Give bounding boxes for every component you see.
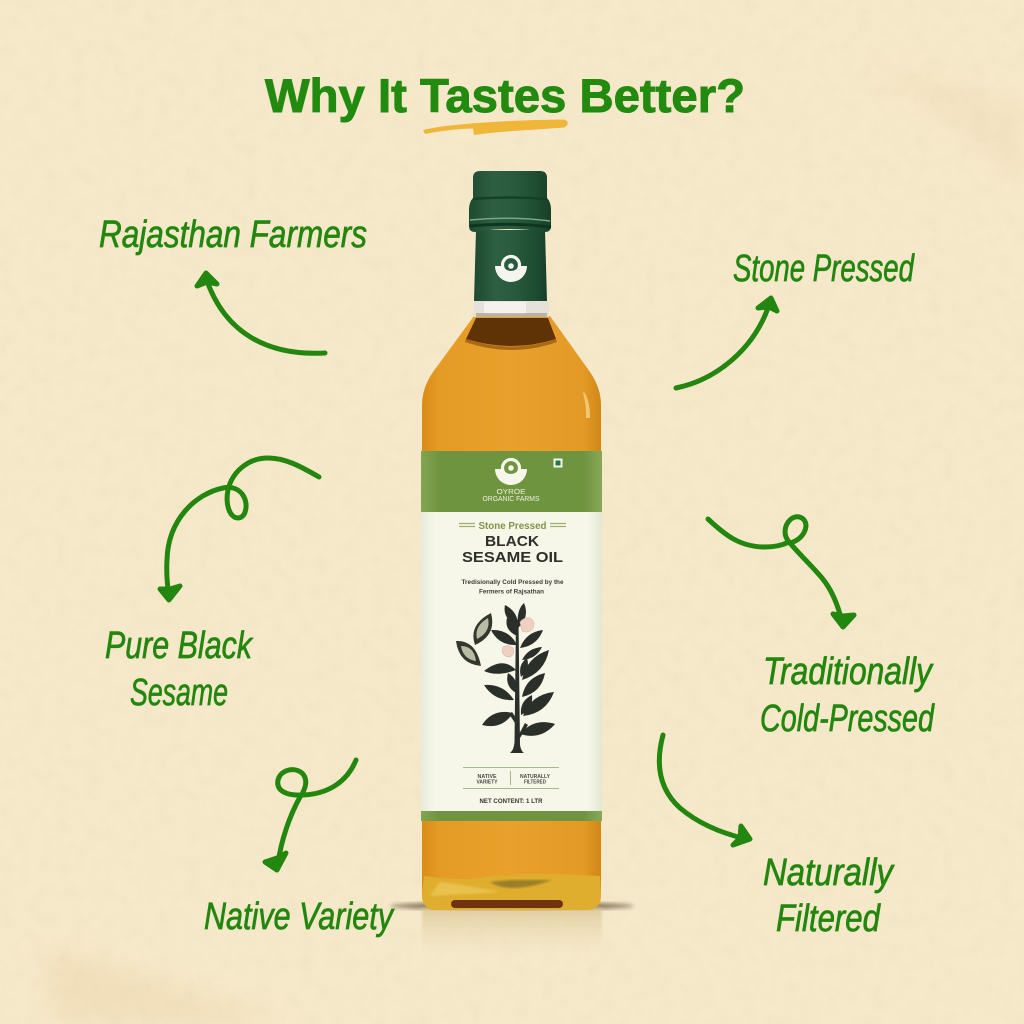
title: Why It Tastes Better?	[265, 69, 745, 122]
label: Pure Black Sesame: Pure Black	[105, 625, 254, 667]
arrow: to Pure Black Sesame	[160, 458, 319, 600]
bottle	[390, 171, 634, 963]
label: Naturally Filtered	[763, 852, 895, 940]
panel: bottle label	[421, 451, 602, 821]
label: Rajasthan Farmers: Rajasthan Farmers	[99, 214, 367, 256]
icon: veg mark	[554, 458, 562, 468]
arrow: to Traditionally Cold-Pressed	[708, 517, 854, 627]
label: Traditionally Cold-Pressed: Cold-Pressed	[760, 698, 935, 740]
product name: BLACK	[485, 533, 539, 550]
icon: neck logo	[495, 256, 527, 282]
description: Fermers of Rajsathan	[479, 590, 544, 596]
product name	[462, 533, 563, 566]
icon: label logo	[495, 460, 527, 485]
arrow: to Rajasthan Farmers	[197, 273, 325, 353]
feature strip: NATURALLY	[520, 774, 551, 780]
description: Tredisionally Cold Pressed by the	[462, 580, 564, 586]
stone pressed tag	[459, 521, 566, 532]
feature strip: NATIVE	[478, 774, 497, 780]
net content: NET CONTENT: 1 LTR	[480, 798, 543, 805]
label: Pure Black Sesame: Sesame	[130, 672, 228, 714]
arrow: to Naturally Filtered	[659, 735, 750, 845]
brand name: OYROE	[496, 487, 526, 496]
label: Pure Black Sesame	[105, 625, 254, 714]
feature strip: FILTERED	[524, 780, 546, 786]
brand name: ORGANIC FARMS	[482, 496, 540, 503]
arrow: to Native Variety	[265, 760, 356, 870]
label: Naturally Filtered: Filtered	[776, 898, 882, 940]
feature strip: VARIETY	[476, 780, 498, 786]
label: Native Variety: Native Variety	[204, 896, 395, 938]
product name: SESAME OIL	[462, 549, 563, 566]
description	[462, 580, 564, 596]
arrow: to Stone Pressed	[676, 298, 777, 388]
label: Traditionally Cold-Pressed: Traditionally	[763, 651, 934, 693]
icon: sesame plant	[456, 603, 555, 753]
stone pressed tag: Stone Pressed	[478, 521, 546, 532]
feature strip	[463, 768, 559, 788]
label: Stone Pressed: Stone Pressed	[733, 248, 915, 290]
label: Traditionally Cold-Pressed	[760, 651, 935, 740]
brand name	[482, 487, 540, 503]
label: Naturally Filtered: Naturally	[763, 852, 895, 894]
